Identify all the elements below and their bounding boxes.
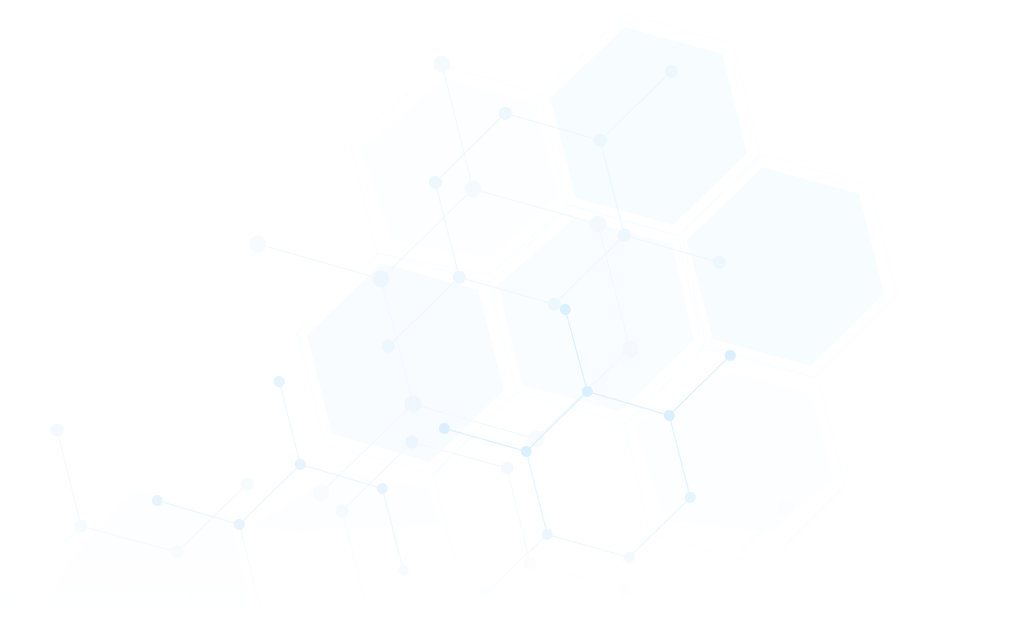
network: front molecule	[439, 304, 736, 599]
filled hexagons	[40, 27, 884, 622]
network: centre bottom	[336, 436, 631, 600]
network: bottom left faint	[4, 424, 254, 610]
hexagon: faint bottom centre	[250, 470, 440, 530]
hexagon outlines	[297, 14, 897, 612]
network: faint large	[250, 56, 794, 552]
hexagon: faint top	[362, 78, 558, 258]
network: top molecule	[382, 65, 726, 353]
bottom fade overlay	[0, 540, 1020, 622]
network: left molecule	[152, 376, 409, 606]
hexagon: centre	[498, 217, 694, 412]
hexagon: top right	[550, 27, 747, 225]
hexagon: centre left	[307, 263, 504, 462]
hexagon: far right	[687, 167, 884, 366]
hexagon: faint bottom left	[40, 490, 255, 622]
hexagon: faint lower right	[635, 372, 832, 532]
